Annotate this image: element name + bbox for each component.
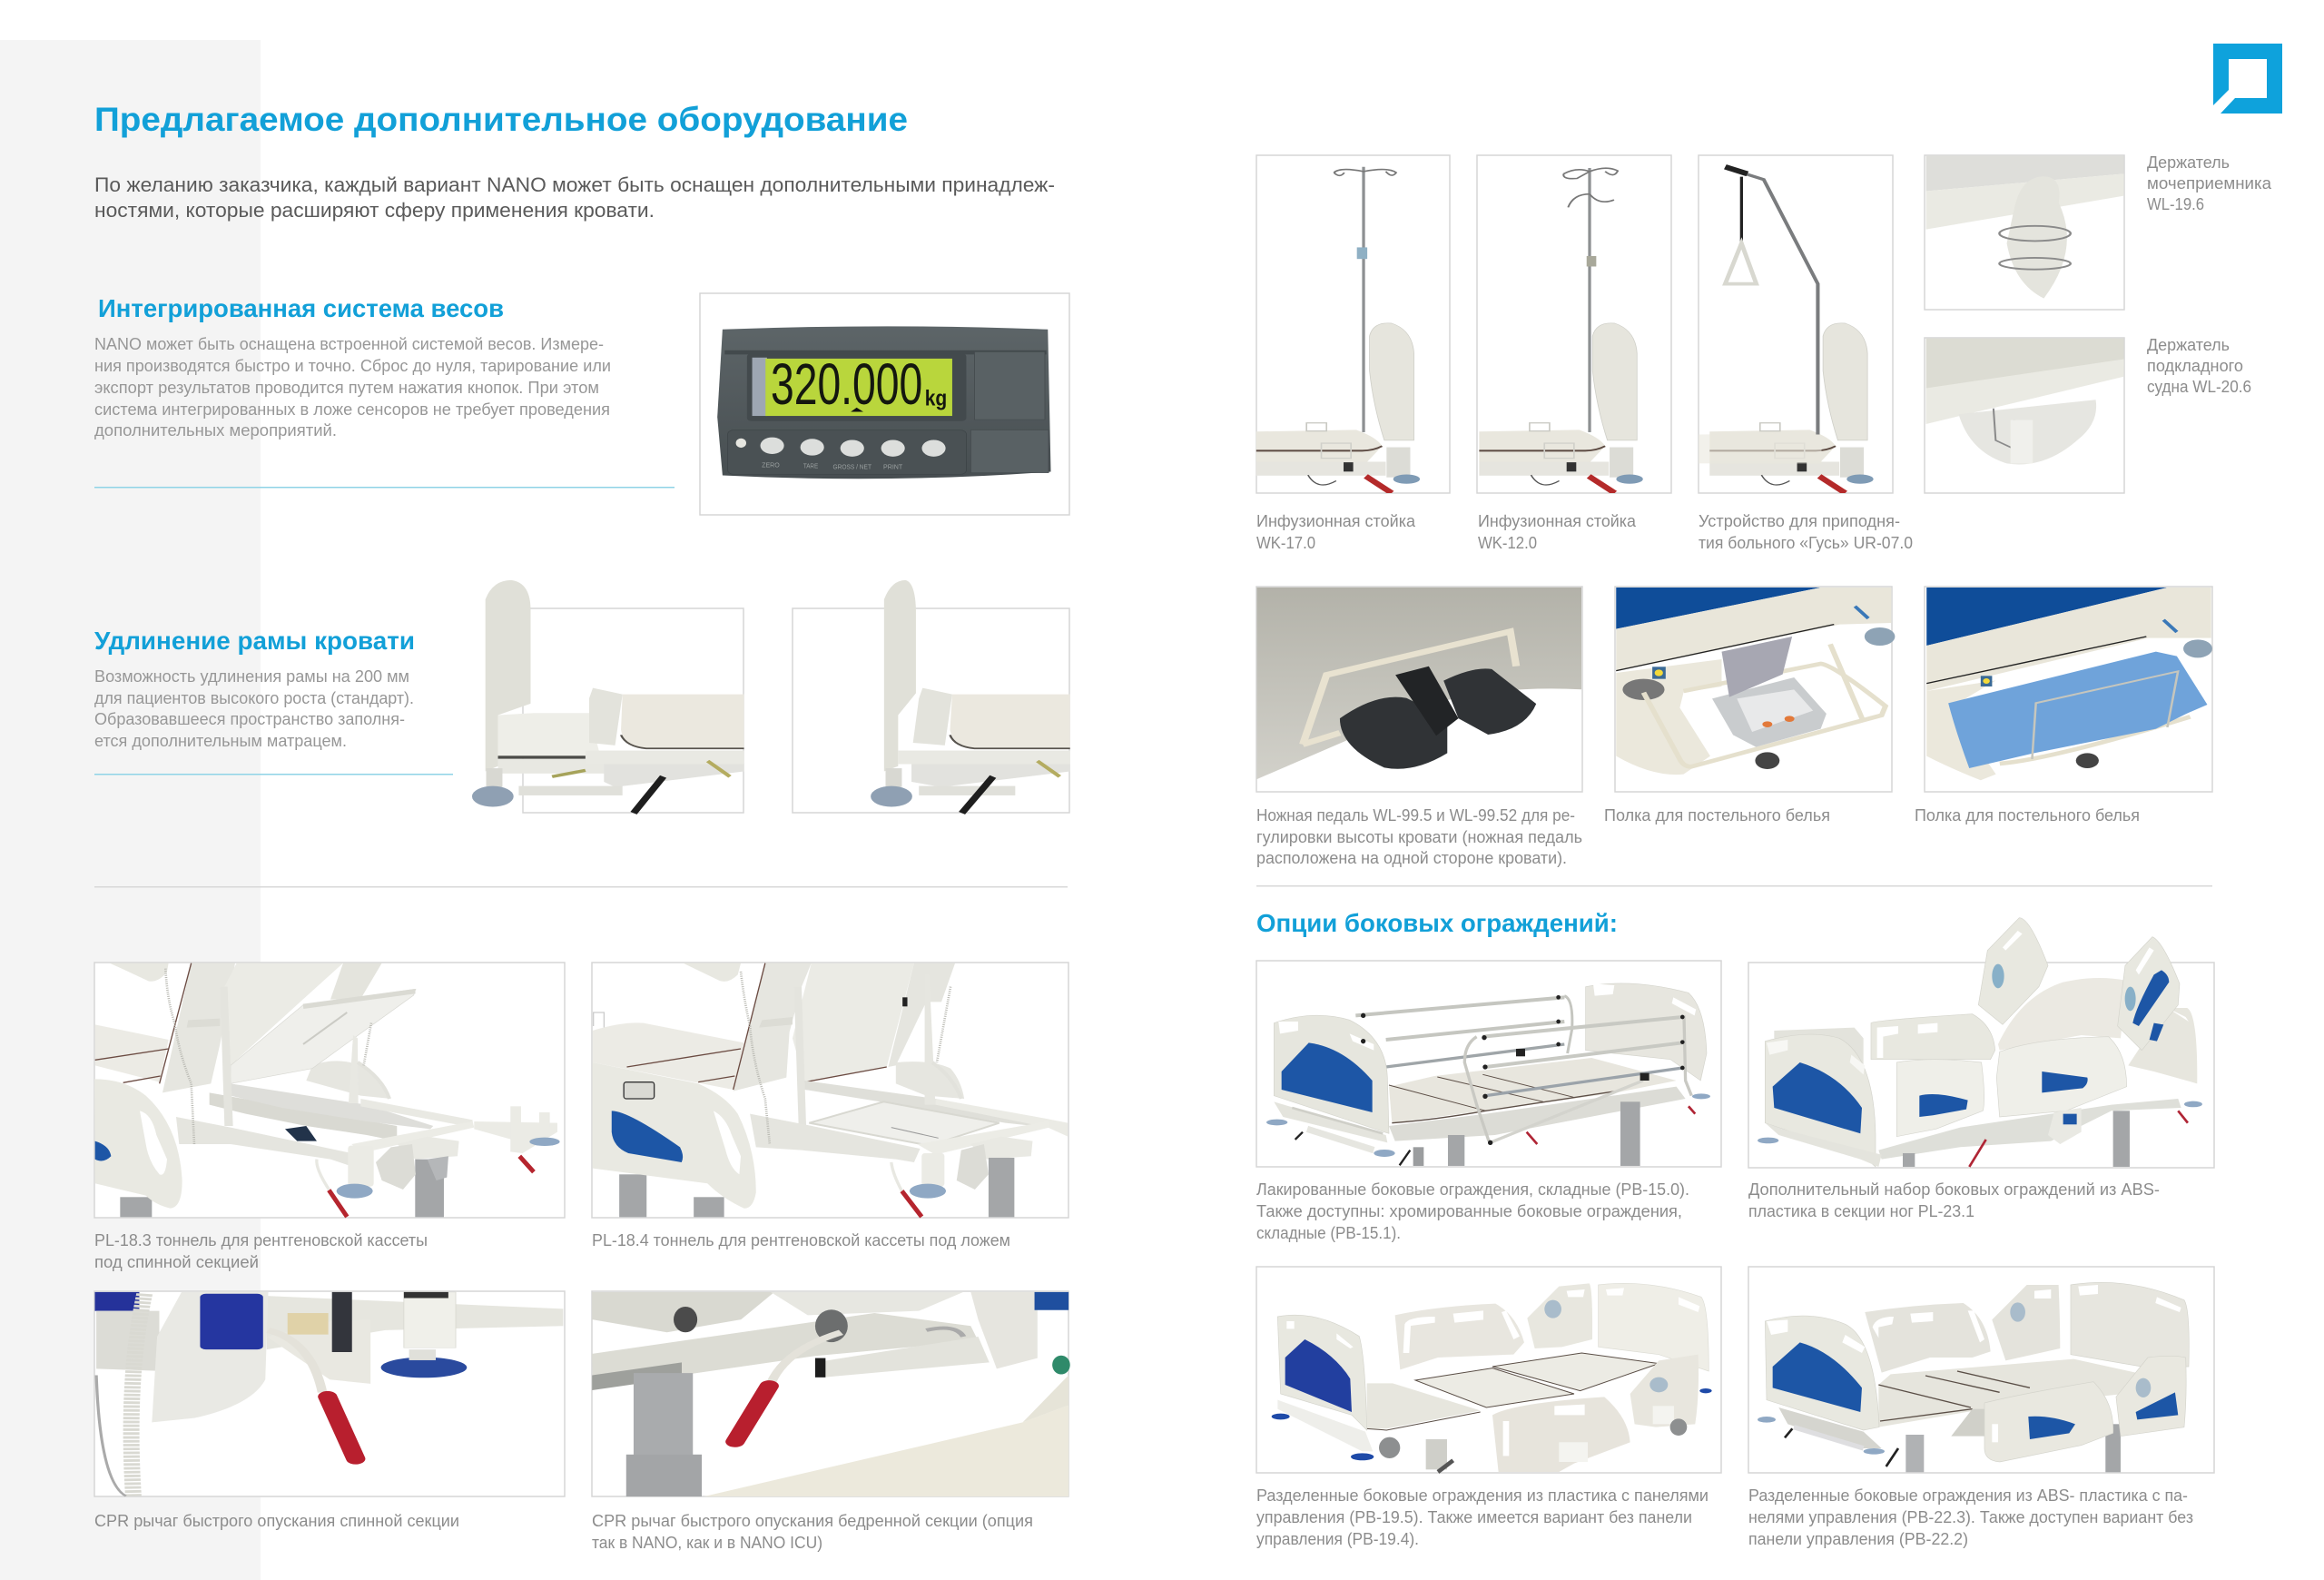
background side panel — [0, 40, 261, 1580]
text: frame extension description: ется дополнительным матрацем. — [94, 731, 347, 750]
text: scales description: NANO может быть оснащена встроенной системой весов. Измере- — [94, 334, 604, 353]
caption: WK-12.0: WK-12.0 — [1478, 533, 1537, 552]
caption: PB-15.0 — [1256, 1180, 1689, 1242]
caption: foot pedal: гулировки высоты кровати (ножная педаль — [1256, 827, 1582, 846]
title: Предлагаемое дополнительное оборудование — [94, 101, 908, 138]
label: WL-20.6: подкладного — [2147, 356, 2243, 375]
caption: WK-17.0: WK-17.0 — [1256, 533, 1315, 552]
caption: UR-07.0: тия больного «Гусь» UR-07.0 — [1699, 533, 1913, 552]
caption: WK-17.0: Инфузионная стойка — [1256, 511, 1416, 530]
text: frame extension description: для пациентов высокого роста (стандарт). — [94, 688, 414, 707]
panel: infusion stand WK-17.0 — [1256, 155, 1450, 493]
caption: PL-23.1 — [1748, 1180, 2160, 1220]
text: scales description: экспорт результатов проводится путем нажатия кнопок. При этом — [94, 378, 599, 397]
panel: split ABS rails PB-22.3 — [1748, 1267, 2214, 1473]
heading: scales: Интегрированная система весов — [98, 294, 504, 322]
caption: PB-22.3 — [1748, 1486, 2193, 1548]
icon: tunnel under bed section — [593, 963, 1068, 1217]
panel: foldable side rails PB-15.0 — [1256, 961, 1721, 1167]
caption: foot pedal — [1256, 805, 1582, 867]
text: frame extension description — [94, 667, 414, 750]
caption: shelf 1: Полка для постельного белья — [1604, 805, 1830, 825]
icon: bed with split ABS rails — [1758, 1282, 2189, 1472]
text: frame extension description: Возможность удлинения рамы на 200 мм — [94, 667, 409, 686]
icon: bedpan — [1926, 339, 2124, 464]
panel: linen shelf with keypad — [1615, 587, 1895, 792]
icon: CPR lever close-up — [94, 1292, 563, 1496]
panel: PL-18.4 cassette tunnel — [592, 963, 1068, 1218]
logo icon — [2213, 44, 2282, 114]
icon: extended bed frame — [472, 580, 744, 813]
icon: weighing indicator — [717, 326, 1051, 479]
icon: urinal in wire holder — [1926, 156, 2124, 299]
label: WL-20.6: Держатель — [2147, 335, 2230, 354]
label: WL-19.6 — [2147, 153, 2272, 213]
caption: PB-19.5: Разделенные боковые ограждения из пластика с панелями — [1256, 1486, 1709, 1505]
panel: weighing display — [700, 293, 1069, 515]
caption: WK-12.0: Инфузионная стойка — [1478, 511, 1637, 530]
panel: bedpan holder — [1925, 338, 2124, 493]
caption: CPR thigh section — [592, 1511, 1033, 1552]
caption: PL-23.1: Дополнительный набор боковых ограждений из ABS- — [1748, 1180, 2160, 1199]
panel: foot pedal — [1256, 587, 1582, 792]
label: WL-20.6 — [2147, 335, 2251, 396]
panel: urinal holder — [1925, 155, 2124, 310]
caption: PB-22.3: нелями управления (РВ-22.3). Также доступен вариант без — [1748, 1507, 2193, 1526]
icon: bed with metal rails — [1266, 983, 1710, 1166]
caption: PB-19.5 — [1256, 1486, 1709, 1548]
caption: PL-18.3: PL-18.3 тоннель для рентгеновской кассеты — [94, 1230, 428, 1249]
intro text — [94, 173, 1055, 222]
panel: PL-18.3 cassette tunnel — [94, 963, 565, 1218]
label: WL-19.6: Держатель — [2147, 153, 2230, 172]
text: scales description: система интегрированных в ложе сенсоров не требует проведения — [94, 400, 610, 419]
icon: four-hook infusion stand — [1479, 168, 1643, 493]
panel: CPR lever back section — [94, 1291, 565, 1496]
text: scales description: дополнительных мероприятий. — [94, 420, 337, 439]
icon: shelf with blue linen — [1926, 588, 2212, 780]
label: WL-20.6: судна WL-20.6 — [2147, 377, 2251, 396]
heading: frame extension: Удлинение рамы кровати — [94, 627, 415, 655]
intro text: ностями, которые расширяют сферу применения кровати. — [94, 199, 655, 222]
panel: CPR lever thigh section — [592, 1291, 1070, 1496]
caption: shelf 2: Полка для постельного белья — [1915, 805, 2140, 825]
caption: WK-12.0 — [1478, 511, 1637, 552]
label: WL-19.6: WL-19.6 — [2147, 194, 2204, 213]
icon: foot pedal — [1256, 588, 1581, 779]
caption: PB-19.5: управления (РВ-19.4). — [1256, 1529, 1419, 1548]
panel: split plastic rails PB-19.5 — [1256, 1267, 1721, 1473]
caption: WK-17.0 — [1256, 511, 1416, 552]
caption: UR-07.0: Устройство для приподня- — [1699, 511, 1900, 530]
panel: infusion stand WK-12.0 — [1477, 155, 1671, 493]
caption: CPR back section: CPR рычаг быстрого опускания спинной секции — [94, 1511, 459, 1530]
icon: weighing indicator: kg — [925, 386, 947, 410]
caption: PB-22.3: панели управления (РВ-22.2) — [1748, 1529, 1968, 1548]
panel: linen shelf with sheet — [1925, 587, 2212, 792]
panel: standard frame photo — [793, 580, 1070, 813]
panel: extended frame photo — [472, 580, 744, 813]
icon: bed with raised ABS rails — [1758, 918, 2202, 1167]
intro text: По желанию заказчика, каждый вариант NANO может быть оснащен дополнительными принадлеж- — [94, 173, 1055, 196]
icon: weighing indicator: TARE — [803, 462, 818, 469]
heading: side rail options: Опции боковых ограждений: — [1256, 909, 1618, 937]
icon: weighing indicator: GROSS / NET — [833, 463, 872, 470]
text: scales description — [94, 334, 611, 439]
caption: PB-15.0: Также доступны: хромированные боковые ограждения, — [1256, 1201, 1682, 1220]
icon: lifting pole with triangle handle — [1699, 167, 1874, 493]
caption: foot pedal: Ножная педаль WL-99.5 и WL-99.52 для ре- — [1256, 805, 1575, 825]
text: scales description: ния производятся быстро и точно. Сброс до нуля, тарирование или — [94, 356, 611, 375]
section: frame extension — [94, 580, 1070, 813]
icon: weighing indicator: 320.000 — [771, 351, 922, 417]
panel: ABS side rails PL-23.1 — [1748, 918, 2214, 1168]
caption: CPR thigh section: так в NANO, как и в NANO ICU) — [592, 1533, 822, 1552]
caption: UR-07.0 — [1699, 511, 1913, 552]
text: frame extension description: Образовавшееся пространство заполня- — [94, 709, 405, 728]
icon: CPR lever under frame — [592, 1292, 1070, 1496]
caption: PL-18.3: под спинной секцией — [94, 1252, 259, 1271]
caption: PL-23.1: пластика в секции ног PL-23.1 — [1748, 1201, 1974, 1220]
caption: foot pedal: расположена на одной стороне кровати). — [1256, 848, 1567, 867]
icon: bed with split rails — [1272, 1283, 1712, 1472]
caption: PB-19.5: управления (РВ-19.5). Также имеется вариант без панели — [1256, 1507, 1692, 1526]
icon: infusion stand on bed — [1256, 167, 1420, 493]
icon: weighing indicator: ZERO — [762, 461, 780, 469]
icon: weighing indicator: PRINT — [883, 463, 903, 470]
caption: PL-18.3 — [94, 1230, 428, 1271]
caption: PB-22.3: Разделенные боковые ограждения из ABS- пластика с па- — [1748, 1486, 2188, 1505]
icon: shelf with control panel — [1616, 588, 1895, 775]
caption: PB-15.0: Лакированные боковые ограждения, складные (РВ-15.0). — [1256, 1180, 1689, 1199]
icon: tunnel under back section — [94, 963, 560, 1217]
label: WL-19.6: мочеприемника — [2147, 173, 2272, 193]
icon: standard bed frame — [871, 580, 1070, 813]
section: integrated scales — [94, 293, 1069, 515]
panel: patient lifter UR-07.0 — [1699, 155, 1893, 493]
caption: CPR thigh section: CPR рычаг быстрого опускания бедренной секции (опция — [592, 1511, 1033, 1530]
caption: PB-15.0: складные (РВ-15.1). — [1256, 1223, 1401, 1242]
caption: PL-18.4: PL-18.4 тоннель для рентгеновской кассеты под ложем — [592, 1230, 1010, 1249]
